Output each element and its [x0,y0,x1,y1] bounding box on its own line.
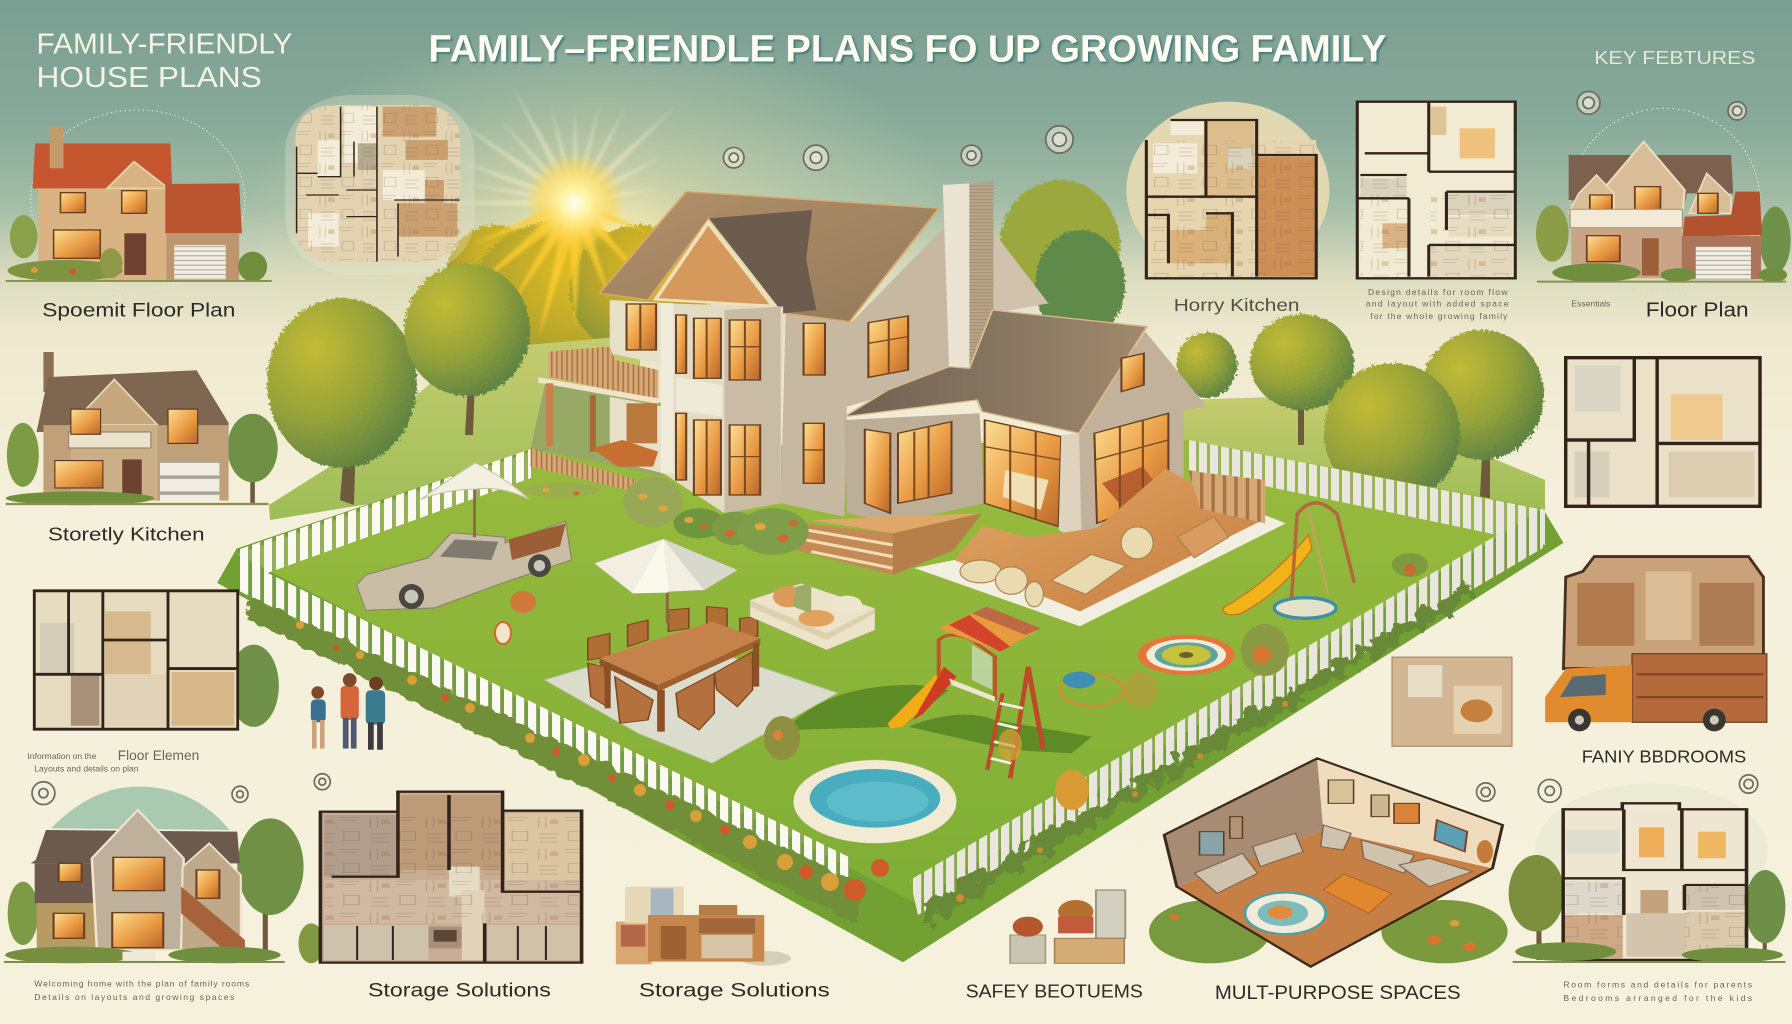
small house: middle left [6,352,278,505]
house: upper windows [627,304,908,380]
umbrella by the truck [421,463,529,537]
small floor plan tile [1392,657,1512,746]
label: top right floor plan: Floor Plan [1646,299,1749,322]
fence: front right with shrubs [910,508,1543,926]
feature icons: concentric rings [32,91,1758,805]
house roof and walls [10,110,245,290]
floor plan: rounded top centre-right [1126,102,1329,278]
caption: left floor plan: Floor Elemen [118,748,199,763]
tree: second left [404,264,530,435]
patio umbrella [594,539,737,623]
label: storage solutions one: Storage Solutions [368,980,551,1002]
label: top right floor plan: Essentials [1571,298,1610,308]
house: entry deck and steps [796,513,982,575]
label: left kitchen: Storetly Kitchen [48,524,205,545]
label: top right floor plan [1571,298,1749,322]
sky glow around the sun [240,20,960,440]
house: lower windows [676,413,824,495]
caption: bottom right: Bedrooms arranged for the kids [1563,993,1752,1003]
caption: top right plan [1366,287,1509,321]
multi-purpose room cutaway [1149,758,1508,967]
house: shaded roof slope [709,210,816,313]
cutaway plan with moving truck [1545,557,1767,731]
label: multi-purpose spaces: MULT-PURPOSE SPACES [1215,982,1461,1004]
corner heading: HOUSE PLANS [37,62,262,94]
caption: bottom right: Room forms and details for parents [1563,979,1752,989]
caption: top right plan: for the whole growing family [1370,311,1508,321]
house: lower roof [844,310,1147,433]
floor plan: bottom right with trees [1509,783,1785,963]
floor plan: round top left [285,95,475,275]
round rug [1245,893,1326,934]
house shrubs [6,248,272,282]
dining chairs [588,607,758,730]
house: upper left wall [610,300,673,367]
floor plan: bottom kitchen [298,792,582,963]
key features heading: KEY FEBTURES [1594,47,1755,68]
patio set [588,539,875,732]
house: balcony [531,347,658,495]
floor plan: left [34,591,279,729]
house: right side wall [1077,332,1207,542]
caption: top right plan: and layout with added space [1366,298,1509,308]
label: family bedrooms: FANIY BBDROOMS [1582,746,1746,766]
caption: bottom right [1563,979,1752,1003]
caption: bottom left [34,978,249,1002]
room sofas [1194,825,1472,893]
caption: bottom left: Welcoming home with the plan of family rooms [34,978,249,988]
floor cushion [1323,874,1391,913]
fence: back left [237,449,531,584]
room art [1200,780,1493,863]
pickup truck [357,521,571,610]
house: wooden gable [656,223,773,306]
room walls and floor [1164,758,1503,967]
caption: top right plan: Design details for room flow [1368,287,1508,297]
trees: right of the house [1177,314,1544,570]
corner heading [37,29,293,94]
house: sunroom [844,413,1168,542]
label: top left floor plan: Spoemit Floor Plan [42,300,235,322]
floor plan: right [1566,358,1760,506]
house windows and door [54,191,147,275]
house: porch recess [531,380,663,477]
caption: left floor plan: Information on the [27,751,97,761]
playset with slide [888,607,1043,778]
storage items: safety [1010,890,1125,963]
caption: left floor plan [27,748,199,773]
dining table [599,622,760,732]
house: right taupe wall [781,225,974,517]
flower beds in the yard [764,553,1428,810]
garden shrubs [1149,900,1508,963]
caption: left floor plan: Layouts and details on plan [34,763,139,773]
play rings and hoop [1060,635,1235,706]
yard shadows on the grass [786,685,1092,753]
background lawn: right of the house [1180,395,1545,510]
garden ornament near the truck [495,591,536,644]
house: chimney [943,182,993,368]
house: back wall beside chimney [992,230,1048,313]
small house: top left [6,110,272,290]
tree: behind the house [1000,180,1125,400]
fence: back right [1189,440,1545,545]
fence: front left with flowers [237,558,889,925]
label: storage solutions two: Storage Solutions [639,980,830,1002]
house: main roof [599,192,939,322]
label: top kitchen: Horry Kitchen [1174,295,1299,315]
house: attic window [1121,353,1144,392]
label: safety bedrooms: SAFEY BEOTUEMS [966,981,1143,1002]
golden trees behind the sun [445,220,710,380]
storage furniture [616,887,791,966]
caption: bottom left: Details on layouts and growing spaces [34,992,234,1002]
swing and yellow slide [1223,503,1354,618]
patio rug [545,640,837,763]
background lawn: left of the house [269,335,640,520]
garden sofa [750,583,875,650]
corner heading: FAMILY-FRIENDLY [37,29,293,61]
main house [523,182,1207,575]
tree: far left [267,298,417,505]
small house: top right [1536,108,1791,292]
floor plan: tall top right [1357,102,1515,278]
house: hedge and flowers along the front [523,477,809,555]
lawn: main yard and outer green border [217,440,1563,962]
sun with rays [440,86,679,340]
main title: FAMILY–FRIENDLE PLANS FO UP GROWING FAMILY [429,28,1386,70]
house: bay window tower [663,303,783,513]
small house: bottom left [4,787,304,963]
family figures [311,673,385,750]
wooden patio with furniture [914,469,1286,626]
swimming pool [793,760,957,843]
